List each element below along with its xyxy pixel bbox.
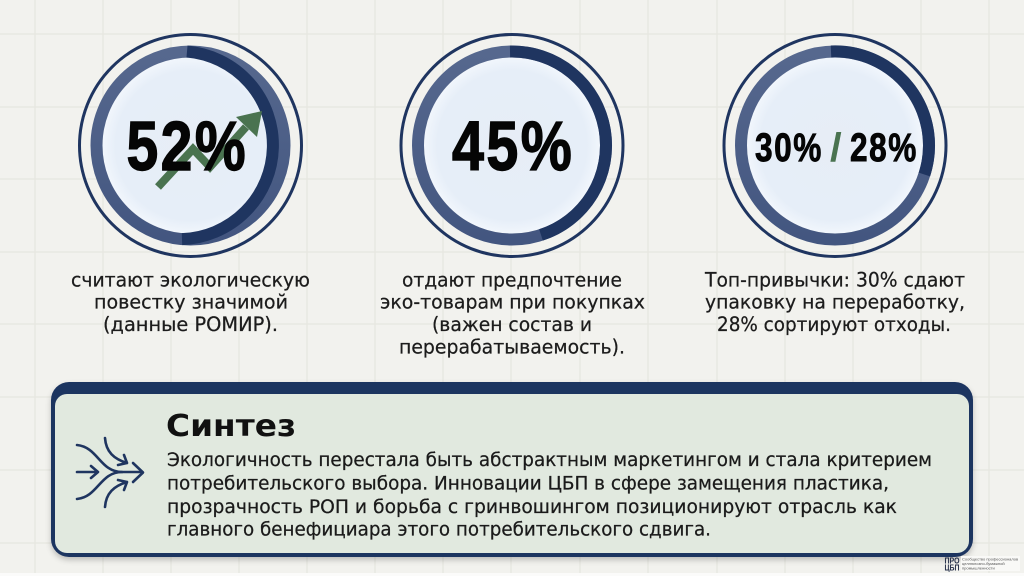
stat value 30% / 28%: 28% [850, 124, 918, 170]
caption 45%: эко-товарам при покупках [380, 290, 645, 314]
logo: ПРО ЦБП: целлюлозно-бумажной [962, 561, 1005, 566]
stat value 52%: 52% [126, 106, 248, 185]
body text: Экологичность перестала быть абстрактным маркетингом и стала критерием [167, 449, 932, 471]
caption 30% / 28%: Топ-привычки: 30% сдают [704, 268, 965, 292]
caption 30% / 28%: упаковку на переработку, [705, 290, 965, 314]
icon: converging arrows [77, 438, 143, 507]
body text: главного бенефициара этого потребительского сдвига. [167, 518, 711, 540]
logo: ПРО ЦБП: промышленности [962, 566, 995, 570]
icon: ring 30% [724, 34, 946, 256]
panel: stat 45% [380, 34, 651, 358]
logo: ПРО ЦБП: ЦБП [944, 564, 960, 572]
icon: ring 45% [401, 34, 623, 256]
icon: growth arrow [158, 111, 262, 187]
stat value 30% / 28%: 30% [755, 124, 823, 170]
logo: ПРО ЦБП: ПРО [944, 556, 960, 566]
stat value 30% / 28%: / [830, 125, 842, 170]
stat value 30% / 28% [755, 124, 918, 170]
logo: ПРО ЦБП: Сообщество профессионалов [962, 556, 1018, 562]
body text: потребительского выбора. Инновации ЦБП в сфере замещения пластика, [167, 472, 889, 494]
panel: stat 30% / 28% [704, 34, 971, 336]
caption 45%: перерабатываемость). [399, 336, 625, 358]
caption 52%: (данные РОМИР). [103, 313, 278, 336]
stat value 45%: 45% [452, 107, 574, 185]
caption 52%: повестку значимой [94, 290, 288, 314]
body text: прозрачность РОП и борьба с гринвошингом позиционируют отрасль как [167, 496, 897, 518]
icon: ring 52% [80, 34, 302, 256]
caption 45%: отдают предпочтение [402, 268, 622, 292]
panel: synthesis [51, 382, 973, 557]
caption 30% / 28%: 28% сортируют отходы. [717, 313, 951, 336]
panel background [51, 382, 973, 557]
panel: stat 52% [71, 34, 316, 336]
caption 52%: считают экологическую [71, 268, 310, 292]
logo: ПРО ЦБП [944, 556, 1020, 572]
caption 45%: (важен состав и [432, 313, 592, 336]
heading: Синтез [166, 409, 296, 444]
